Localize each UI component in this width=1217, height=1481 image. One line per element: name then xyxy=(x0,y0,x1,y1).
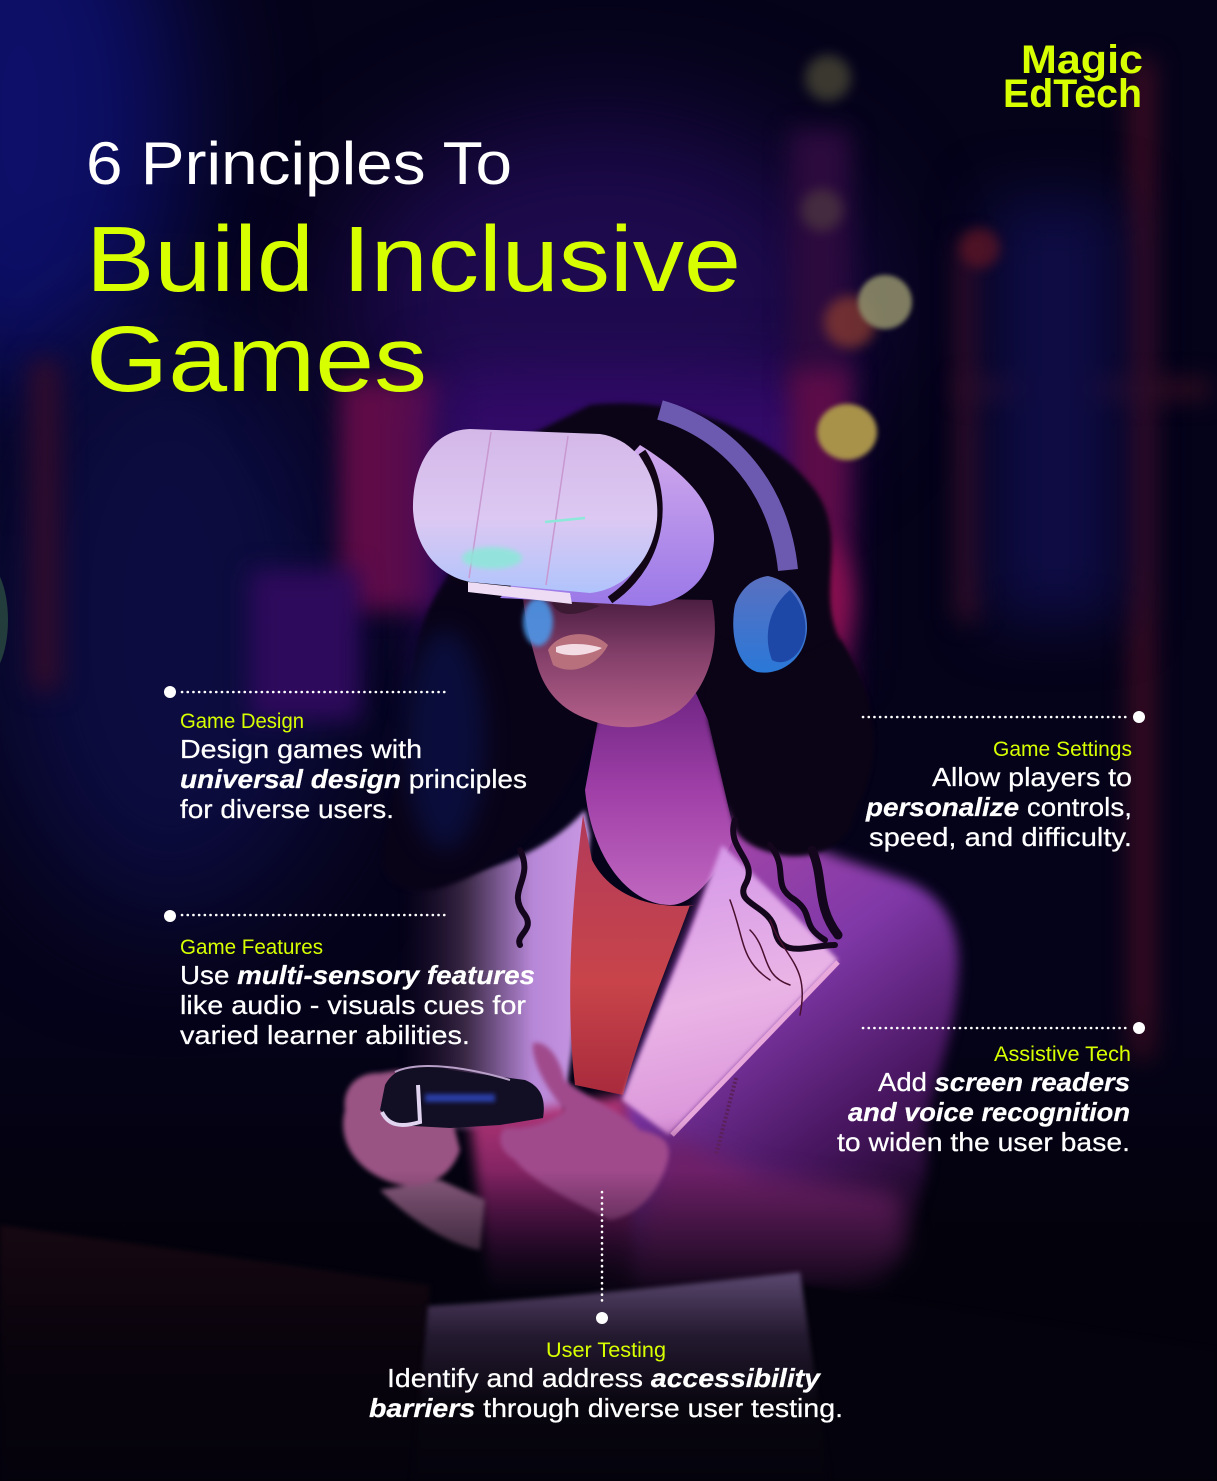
visor reflection xyxy=(462,547,522,569)
callout: user testing: barriers through diverse user testing. xyxy=(369,1393,843,1423)
callout: game features: like audio - visuals cues for xyxy=(180,990,526,1020)
nose xyxy=(552,598,600,614)
bokeh lights xyxy=(801,55,1000,460)
title: Games xyxy=(86,307,427,411)
callout: game design: for diverse users. xyxy=(180,794,394,824)
lips xyxy=(548,634,608,670)
callout: game settings: speed, and difficulty. xyxy=(869,822,1132,852)
title: Build Inclusive xyxy=(86,207,741,311)
face xyxy=(523,597,715,727)
callout: game settings: personalize controls, xyxy=(865,792,1132,822)
callout: game settings: Game Settings xyxy=(993,738,1132,761)
callout: game features: Game Features xyxy=(180,936,323,959)
lower figure fade xyxy=(0,1170,1217,1300)
logo: Magic xyxy=(1021,38,1143,82)
callout: assistive tech: Add screen readers xyxy=(878,1067,1130,1097)
callout: assistive tech: to widen the user base. xyxy=(837,1127,1130,1157)
table and paper xyxy=(0,1225,1217,1481)
callout: user testing: Identify and address accessibility xyxy=(387,1363,822,1393)
back hair xyxy=(445,403,873,800)
illustration: woman in VR headset xyxy=(0,403,1217,1481)
right hair xyxy=(708,640,873,856)
callout: game features: varied learner abilities. xyxy=(180,1020,470,1050)
right hand xyxy=(500,1043,669,1220)
left hair xyxy=(382,580,598,891)
callout: game design: universal design principles xyxy=(180,764,527,794)
callout: assistive tech xyxy=(837,1022,1145,1157)
title: 6 Principles To xyxy=(86,130,512,197)
neck and chest xyxy=(585,680,735,905)
VR headset xyxy=(413,429,714,606)
logo: EdTech xyxy=(1003,72,1142,116)
foam strip xyxy=(610,452,659,600)
lower shirt and jacket hem xyxy=(470,1095,640,1290)
shirt xyxy=(570,815,695,1095)
title xyxy=(86,130,741,411)
callout: user testing: User Testing xyxy=(546,1339,666,1362)
left hair blue sheen xyxy=(405,630,485,850)
headset side shell xyxy=(500,445,714,606)
logo xyxy=(1003,38,1143,116)
callout: game features: Use multi-sensory features xyxy=(180,960,535,990)
left hand xyxy=(343,1070,485,1250)
callout: game design: Game Design xyxy=(180,710,304,733)
callout: assistive tech: Assistive Tech xyxy=(994,1043,1131,1066)
callout: game design xyxy=(164,686,527,824)
lapel xyxy=(622,845,838,1135)
callout: assistive tech: and voice recognition xyxy=(848,1097,1130,1127)
controller xyxy=(380,1065,552,1142)
callout: game design: Design games with xyxy=(180,734,422,764)
bottom trim xyxy=(468,582,572,604)
lower sleeve xyxy=(630,1135,905,1290)
callout: game settings xyxy=(863,711,1145,852)
callout: user testing xyxy=(369,1192,843,1423)
left jacket body xyxy=(400,810,590,1130)
zipper xyxy=(716,1078,736,1155)
right jacket body and sleeve xyxy=(600,805,959,1290)
front visor xyxy=(413,429,657,593)
callout: game settings: Allow players to xyxy=(932,762,1132,792)
headband and earcup xyxy=(660,410,807,673)
hair curls xyxy=(518,820,838,1015)
callout: game features xyxy=(164,910,535,1050)
